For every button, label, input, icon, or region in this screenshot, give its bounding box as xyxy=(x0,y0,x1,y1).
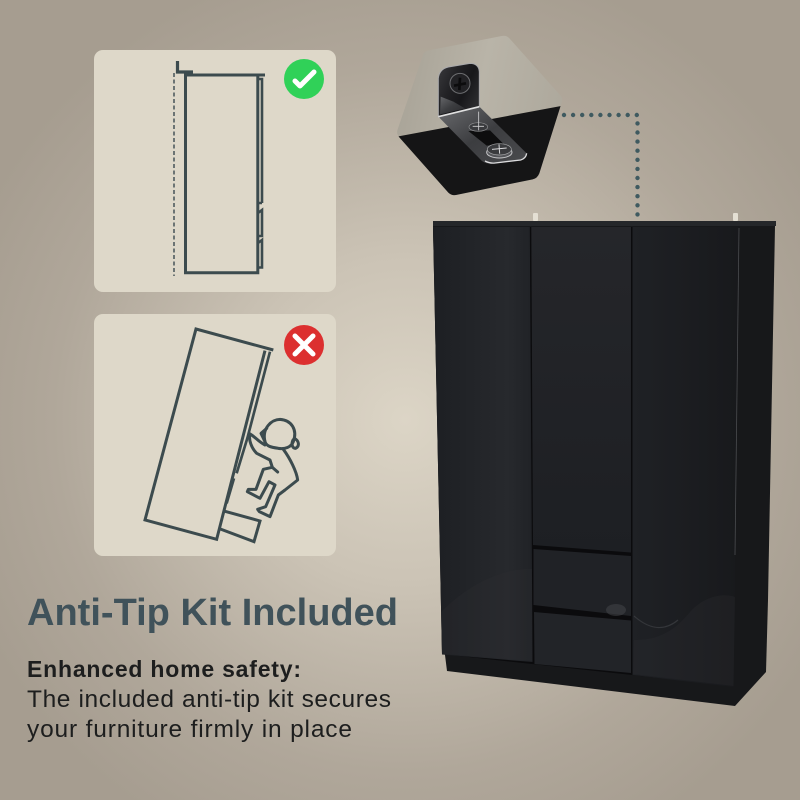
cabinet side outline xyxy=(186,75,265,273)
child climbing xyxy=(247,419,298,517)
dotted connector xyxy=(564,115,638,216)
icon: metal bracket xyxy=(438,63,527,164)
wardrobe xyxy=(433,213,776,706)
text block: safety description: The included anti-tip kit secures xyxy=(27,686,391,713)
door edge highlight xyxy=(735,228,739,555)
text block: safety description xyxy=(27,656,391,743)
wall dashed line xyxy=(173,73,175,276)
lower drawer xyxy=(534,612,631,673)
top board xyxy=(433,221,776,226)
panel: correct installation xyxy=(94,50,336,292)
text block: safety description: your furniture firmly in place xyxy=(27,716,352,743)
icon: red cross xyxy=(284,325,324,365)
side panel and plinth xyxy=(433,226,775,706)
left door xyxy=(433,227,532,662)
icon: green check xyxy=(284,59,324,99)
middle door xyxy=(531,227,631,552)
hexagon detail: anti-tip bracket xyxy=(397,36,560,196)
gloss reflections xyxy=(633,595,735,686)
text block: safety description: Enhanced home safety: xyxy=(27,656,301,682)
mounting tabs xyxy=(533,213,738,221)
tipping cabinet outline xyxy=(145,329,273,542)
door gap base xyxy=(433,227,739,686)
panel: incorrect tipping xyxy=(94,314,336,556)
right door xyxy=(632,227,739,687)
upper drawer xyxy=(534,549,631,616)
icon: wall bracket xyxy=(178,61,193,72)
title: Anti-Tip Kit Included xyxy=(27,592,398,634)
